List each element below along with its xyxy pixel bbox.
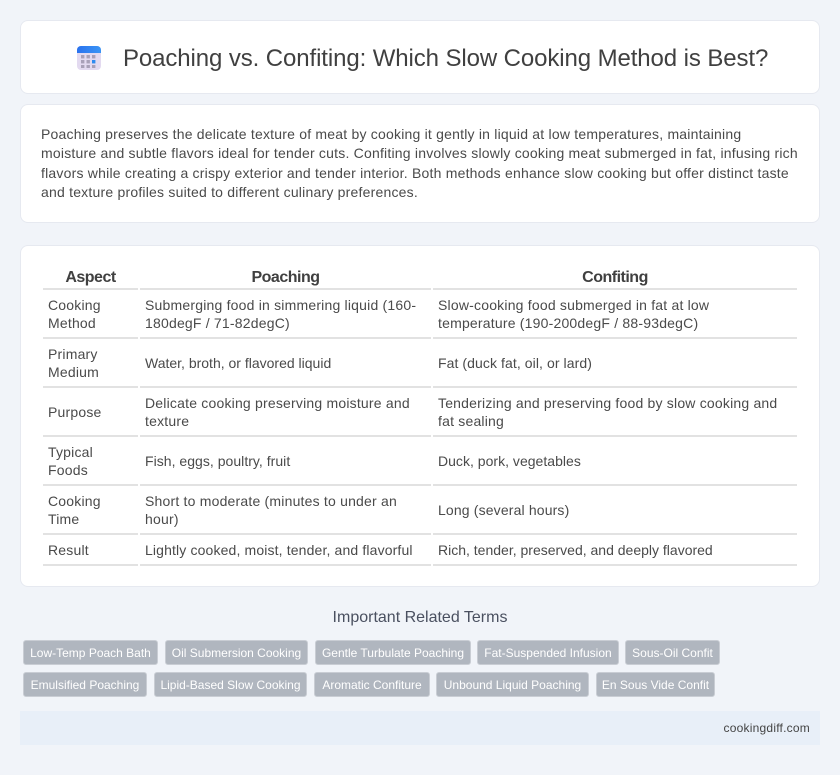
row: primary medium xyxy=(48,346,592,380)
row: typical foods: Foods xyxy=(48,462,88,478)
row: typical foods: Fish, eggs, poultry, fruit xyxy=(145,453,290,469)
title: Poaching vs. Confiting: Which Slow Cooking Method is Best? xyxy=(123,45,768,72)
related term tags: Low-Temp Poach Bath xyxy=(30,646,151,660)
row: result xyxy=(48,542,713,558)
table header: Confiting xyxy=(582,269,648,286)
row: primary medium: Water, broth, or flavored liquid xyxy=(145,355,331,371)
row: cooking time: Time xyxy=(48,511,79,527)
row: purpose: Delicate cooking preserving moisture and xyxy=(145,395,410,411)
text: introduction paragraph xyxy=(41,126,798,200)
row: cooking time: Long (several hours) xyxy=(438,502,569,518)
row: cooking time: Short to moderate (minutes to under an xyxy=(145,493,397,509)
row: cooking method: temperature (190-200degF / 88-93degC) xyxy=(438,315,698,331)
row: purpose: Tenderizing and preserving food by slow cooking and xyxy=(438,395,777,411)
row: cooking time xyxy=(48,493,569,527)
related term tags: Oil Submersion Cooking xyxy=(172,646,301,660)
row: cooking method: Submerging food in simmering liquid (160- xyxy=(145,297,416,313)
text: introduction paragraph: Poaching preserves the delicate texture of meat by cooking it gently in liquid at low temperatures, maintaining xyxy=(41,126,741,142)
text: source: cookingdiff.com xyxy=(724,721,810,735)
row: purpose xyxy=(48,395,777,429)
footer xyxy=(20,711,820,745)
related term tags: Sous-Oil Confit xyxy=(632,646,713,660)
icon: calendar xyxy=(77,46,101,70)
related term tags: Aromatic Confiture xyxy=(322,678,422,692)
row: purpose: Purpose xyxy=(48,404,102,420)
table header: Poaching xyxy=(251,269,320,286)
text: introduction paragraph: moisture and subtle flavors ideal for tender cuts. Confiting involves slowly cooking meat submerged in fat, infusing rich xyxy=(41,145,798,161)
row: result: Result xyxy=(48,542,89,558)
related term tags: Gentle Turbulate Poaching xyxy=(322,646,464,660)
related term tags xyxy=(23,640,720,697)
related term tags: En Sous Vide Confit xyxy=(602,678,709,692)
panel: comparison table xyxy=(20,245,820,587)
table header: Aspect xyxy=(65,269,116,286)
row: typical foods xyxy=(48,444,581,478)
row: cooking method: Method xyxy=(48,315,96,331)
row: typical foods: Typical xyxy=(48,444,93,460)
row: primary medium: Medium xyxy=(48,364,99,380)
row: purpose: texture xyxy=(145,413,189,429)
row: cooking time: Cooking xyxy=(48,493,101,509)
panel: introduction xyxy=(20,104,820,223)
row: cooking method xyxy=(48,297,709,331)
panel: header xyxy=(20,20,820,94)
row: cooking method: Cooking xyxy=(48,297,101,313)
row: cooking method: Slow-cooking food submerged in fat at low xyxy=(438,297,709,313)
related term tags: Lipid-Based Slow Cooking xyxy=(160,678,301,692)
text: introduction paragraph: and texture profiles suited to different culinary preferences. xyxy=(41,184,418,200)
row: typical foods: Duck, pork, vegetables xyxy=(438,453,581,469)
row: cooking method: 180degF / 71-82degC) xyxy=(145,315,290,331)
related term tags: Fat-Suspended Infusion xyxy=(484,646,612,660)
row: result: Lightly cooked, moist, tender, and flavorful xyxy=(145,542,413,558)
row: cooking time: hour) xyxy=(145,511,179,527)
row: primary medium: Primary xyxy=(48,346,98,362)
heading: related terms: Important Related Terms xyxy=(333,609,507,626)
related term tags: Unbound Liquid Poaching xyxy=(444,678,581,692)
row: result: Rich, tender, preserved, and deeply flavored xyxy=(438,542,713,558)
row: primary medium: Fat (duck fat, oil, or lard) xyxy=(438,355,592,371)
related term tags: Emulsified Poaching xyxy=(31,678,139,692)
table header xyxy=(65,269,648,286)
row: purpose: fat sealing xyxy=(438,413,504,429)
text: introduction paragraph: flavors while creating a crispy exterior and tender interior. Both methods enhance slow cooking but offer distinct taste xyxy=(41,165,789,181)
